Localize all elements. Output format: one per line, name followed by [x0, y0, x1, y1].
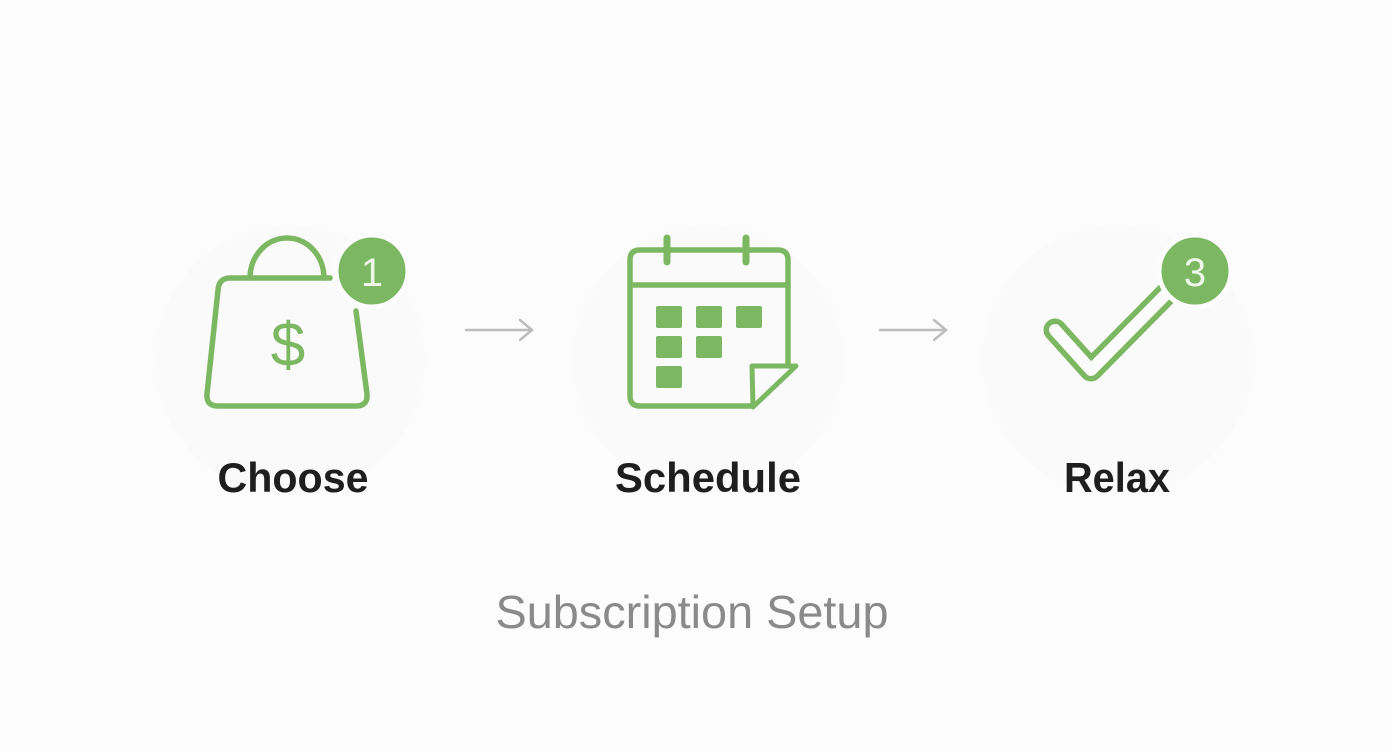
- step 2: schedule: [573, 225, 843, 501]
- icon: calendar: [630, 238, 796, 407]
- label: Choose: Choose: [218, 454, 368, 501]
- icon: shopping bag: [207, 238, 367, 406]
- arrow 2: [880, 320, 946, 340]
- icon: shopping bag: $: [271, 311, 305, 380]
- badge 1: [336, 235, 408, 307]
- badge 3: 3: [1184, 251, 1206, 295]
- icon: checkmark: [1055, 285, 1175, 370]
- badge 1: 1: [361, 251, 383, 295]
- step 1: choose: [155, 225, 425, 501]
- arrow 1: [466, 320, 532, 340]
- label: Relax: Relax: [1064, 454, 1171, 501]
- badge 3: [1159, 235, 1231, 307]
- subtitle: Subscription Setup: [496, 586, 888, 638]
- step 3: relax: [982, 225, 1252, 501]
- label: Schedule: Schedule: [615, 454, 801, 501]
